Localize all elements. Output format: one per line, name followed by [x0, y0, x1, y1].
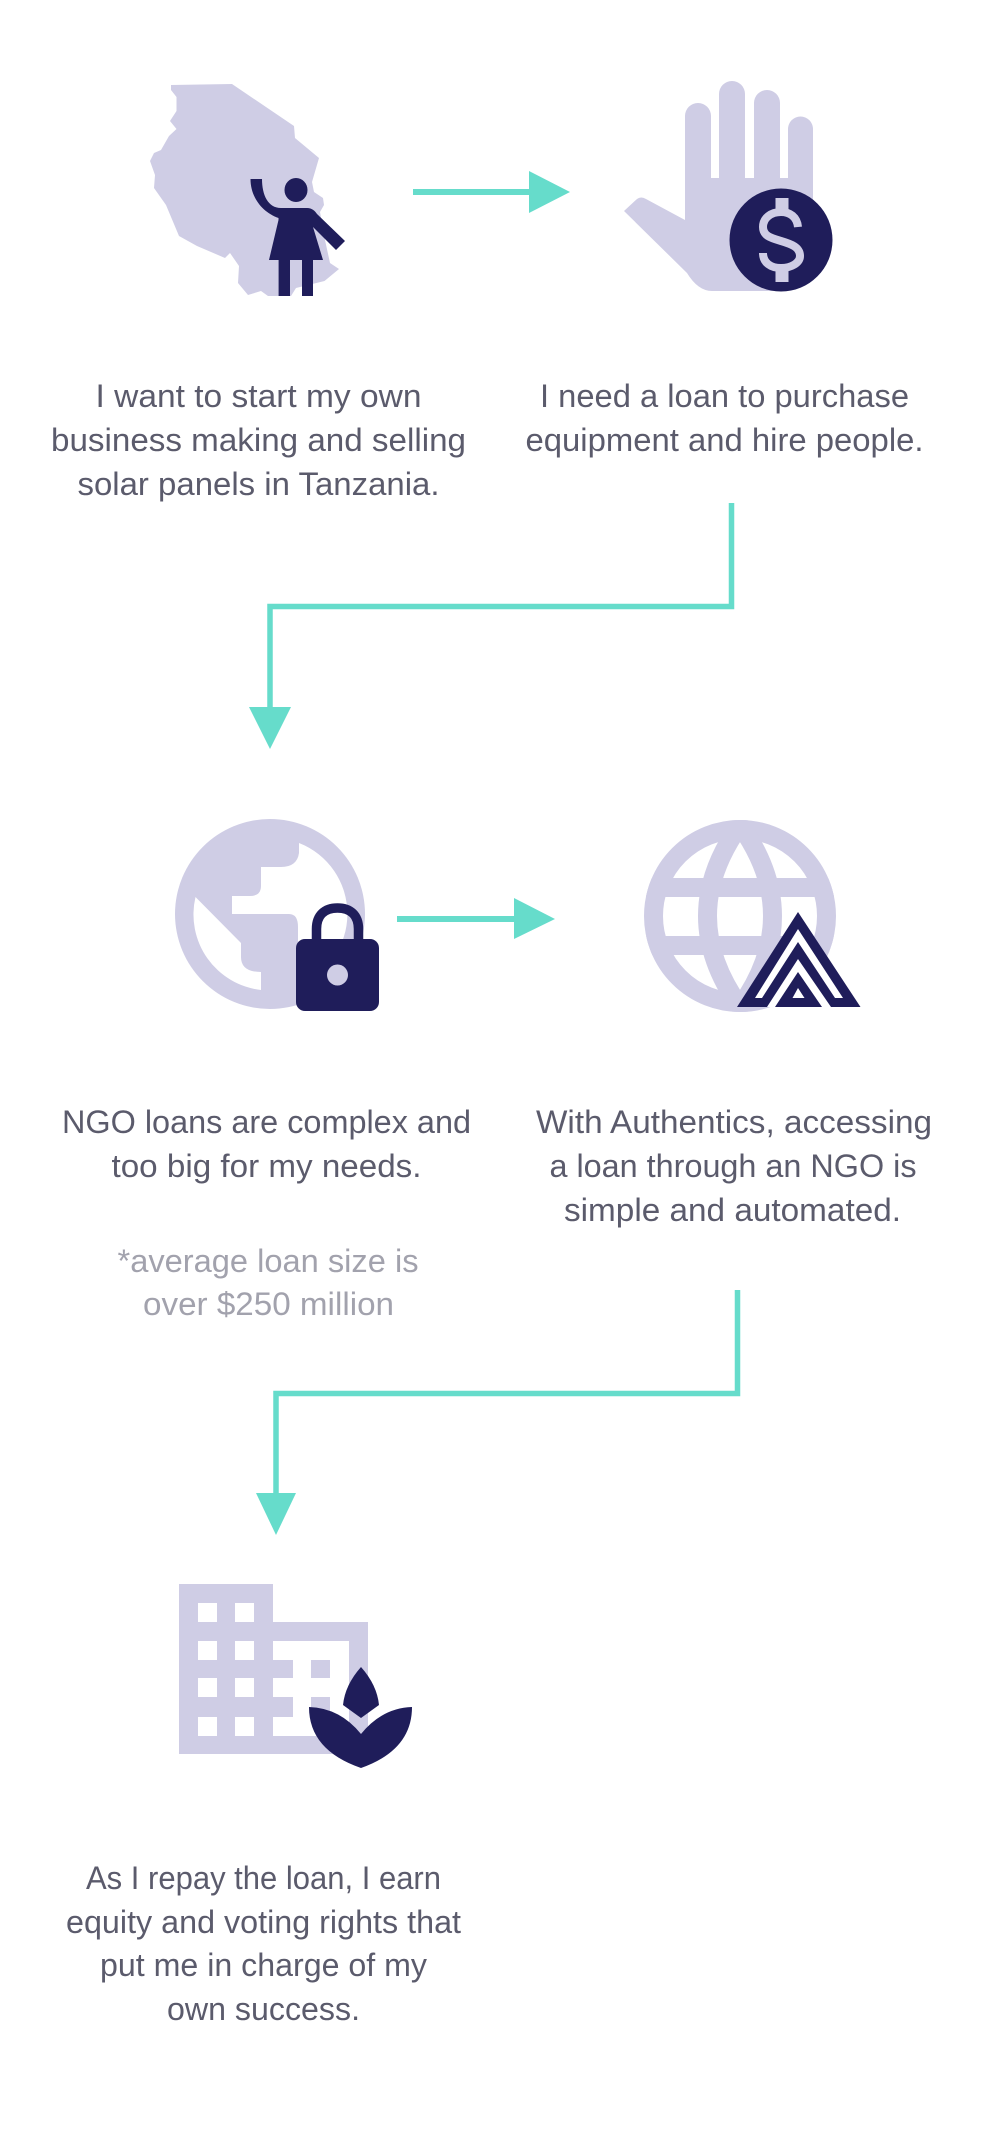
text: step 5: equity and voting rights that: [66, 1904, 461, 1940]
text: step 5: As I repay the loan, I earn: [86, 1860, 441, 1896]
arrow: step 4 to step 5: [256, 1290, 738, 1535]
text: step 2: I need a loan to purchase: [540, 378, 909, 414]
text: step 4: simple and automated.: [564, 1192, 901, 1228]
icon: globe with padlock: [175, 819, 379, 1011]
text: step 5: [66, 1860, 461, 2027]
text: loan size note: [118, 1243, 418, 1322]
text: step 1: I want to start my own: [96, 378, 422, 414]
logo: Authentics triangle: [737, 912, 860, 1007]
text: step 2: equipment and hire people.: [526, 422, 924, 458]
text: step 4: a loan through an NGO is: [550, 1148, 916, 1184]
text: step 2: [526, 378, 924, 458]
text: step 5: put me in charge of my: [100, 1947, 427, 1983]
text: step 1: business making and selling: [51, 422, 466, 458]
arrow: step 2 to step 3: [249, 503, 732, 749]
icon: wireframe globe with Authentics logo: [640, 825, 860, 1007]
icon: Tanzania map with woman: [150, 84, 345, 296]
text: step 4: With Authentics, accessing: [536, 1104, 932, 1140]
text: step 3: NGO loans are complex and: [62, 1104, 471, 1140]
arrow: step 1 to step 2: [413, 171, 570, 213]
text: loan size note: *average loan size is: [118, 1243, 418, 1279]
text: step 4: [536, 1104, 932, 1228]
text: loan size note: over $250 million: [143, 1286, 394, 1322]
icon: building with leaves: [179, 1584, 412, 1768]
text: step 1: [51, 378, 466, 502]
text: step 3: too big for my needs.: [112, 1148, 422, 1184]
icon: hand with dollar coin: [624, 81, 832, 292]
text: step 3: [62, 1104, 471, 1184]
arrow: step 3 to step 4: [397, 898, 555, 939]
text: step 5: own success.: [167, 1991, 360, 2027]
text: step 1: solar panels in Tanzania.: [78, 466, 439, 502]
